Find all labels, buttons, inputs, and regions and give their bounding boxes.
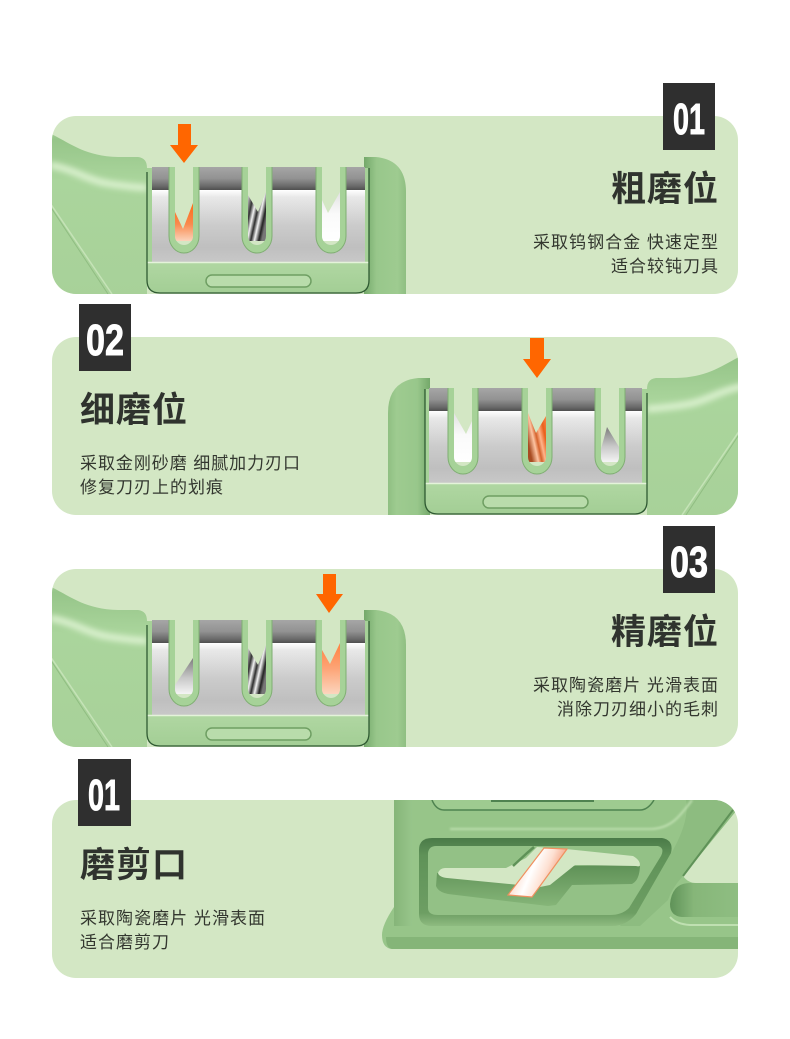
illustration: ceramic slot sharpener [40, 582, 406, 753]
illustration: coarse slot sharpener [40, 129, 406, 300]
description: fine [80, 454, 300, 497]
number badge 03 [663, 526, 715, 593]
heading: scissors: 磨剪口 [80, 846, 187, 885]
description: coarse: 采取钨钢合金 快速定型 [533, 233, 718, 252]
arrow: ceramic slot [316, 574, 343, 613]
description: scissors [80, 909, 265, 952]
number badge 02 [79, 304, 131, 371]
panel: fine slot [52, 304, 754, 521]
description: ceramic: 采取陶瓷磨片 光滑表面 [533, 676, 718, 695]
number badge 02: 02 [86, 316, 124, 365]
number badge 03: 03 [670, 538, 708, 587]
illustration: fine slot sharpener [388, 358, 738, 515]
description: coarse [533, 233, 718, 276]
number badge 01 [78, 759, 131, 826]
description: fine: 修复刀刃上的划痕 [80, 478, 223, 497]
heading: ceramic: 精磨位 [611, 613, 718, 652]
description: ceramic [533, 676, 718, 719]
panel: scissor slot [52, 759, 745, 978]
heading: coarse: 粗磨位 [611, 170, 718, 209]
illustration: scissor sharpener [382, 800, 745, 949]
arrow: coarse slot [170, 124, 198, 163]
arrow: fine slot [523, 338, 551, 378]
description: scissors: 采取陶瓷磨片 光滑表面 [80, 909, 265, 928]
description: ceramic: 消除刀刃细小的毛刺 [557, 700, 718, 719]
number badge 01 [663, 83, 715, 150]
ceramic sharpening strip [508, 848, 567, 897]
blade in fine slot [528, 413, 546, 462]
panel: ceramic slot [40, 526, 738, 753]
heading: fine: 细磨位 [80, 391, 187, 430]
blade in ceramic slot [322, 643, 340, 694]
panel: coarse slot [40, 83, 738, 300]
blade in coarse slot [175, 203, 193, 241]
description: fine: 采取金刚砂磨 细腻加力刃口 [80, 454, 300, 473]
number badge 01: 01 [88, 771, 120, 820]
number badge 01: 01 [673, 95, 705, 144]
description: scissors: 适合磨剪刀 [80, 933, 169, 952]
description: coarse: 适合较钝刀具 [611, 257, 718, 276]
